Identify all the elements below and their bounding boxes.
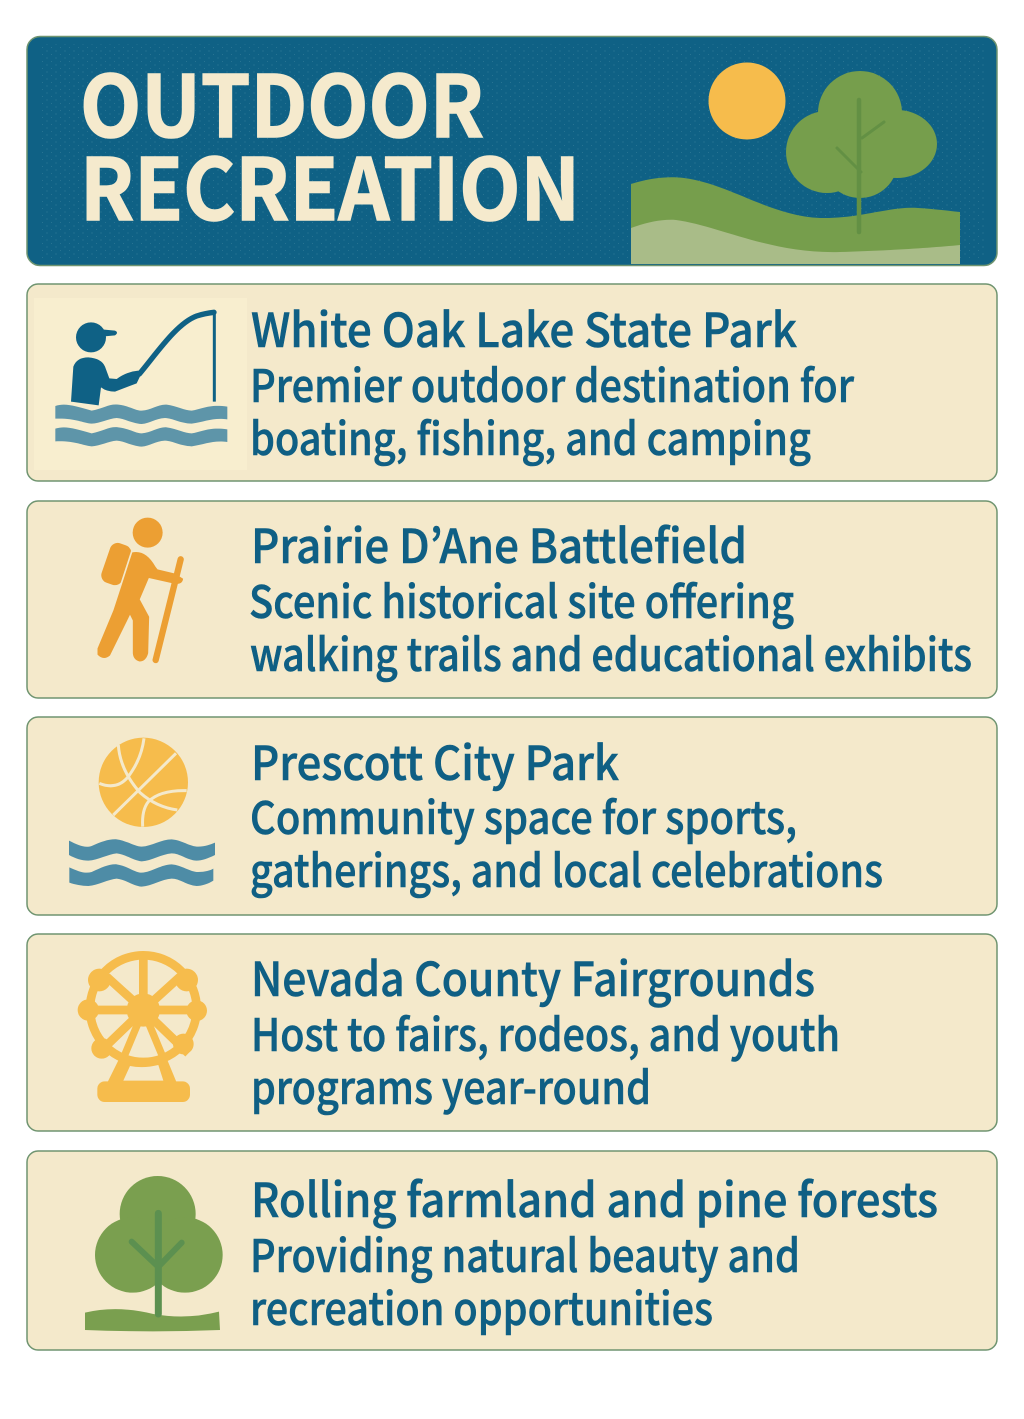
icon: basketball over water — [69, 738, 215, 887]
title: OUTDOOR — [80, 39, 484, 162]
text: Nevada County Fairgrounds — [251, 941, 840, 1117]
text: Prairie D'Ane Battlefield — [249, 508, 972, 684]
panel: header banner — [27, 36, 997, 266]
title: RECREATION — [80, 122, 580, 245]
panel: White Oak Lake State Park — [27, 284, 997, 481]
icon: hills — [631, 177, 960, 264]
text: Prairie D'Ane Battlefield: Scenic historical site offering — [249, 566, 794, 631]
text: White Oak Lake State Park: Premier outdoor destination for — [250, 350, 855, 415]
text: Prescott City Park: Prescott City Park — [251, 725, 619, 794]
text: Nevada County Fairgrounds: Host to fairs, rodeos, and youth — [251, 999, 840, 1064]
text: Rolling farmland and pine forests: recreation opportunities — [250, 1273, 713, 1338]
icon: hiker — [97, 518, 184, 662]
icon backdrop — [34, 298, 247, 470]
text: Rolling farmland and pine forests — [250, 1162, 938, 1338]
text: White Oak Lake State Park: White Oak Lake State Park — [251, 292, 797, 361]
icon: tree — [85, 1176, 223, 1331]
icon: tree — [786, 71, 937, 232]
text: Rolling farmland and pine forests: Rolling farmland and pine forests — [251, 1162, 938, 1231]
text: White Oak Lake State Park — [250, 292, 855, 468]
panel: Prairie D'Ane Battlefield — [27, 501, 997, 698]
text: Prescott City Park: gatherings, and local celebrations — [250, 835, 883, 900]
icon: fisherman — [55, 312, 227, 447]
text: Prairie D'Ane Battlefield: Prairie D’Ane Battlefield — [251, 508, 747, 577]
text: Prescott City Park: Community space for sports, — [250, 782, 797, 847]
icon: sun — [708, 62, 786, 140]
text: Nevada County Fairgrounds: programs year-round — [251, 1052, 651, 1117]
panel: Nevada County Fairgrounds — [27, 934, 997, 1131]
text: White Oak Lake State Park: boating, fishing, and camping — [250, 403, 811, 468]
icon: ferris wheel — [78, 955, 207, 1102]
panel: Rolling farmland and pine forests — [27, 1151, 997, 1350]
panel: Prescott City Park — [27, 717, 997, 915]
text: Rolling farmland and pine forests: Providing natural beauty and — [250, 1220, 800, 1285]
title — [80, 39, 580, 245]
text: Nevada County Fairgrounds: Nevada County Fairgrounds — [251, 941, 815, 1010]
text: Prescott City Park — [250, 725, 883, 900]
